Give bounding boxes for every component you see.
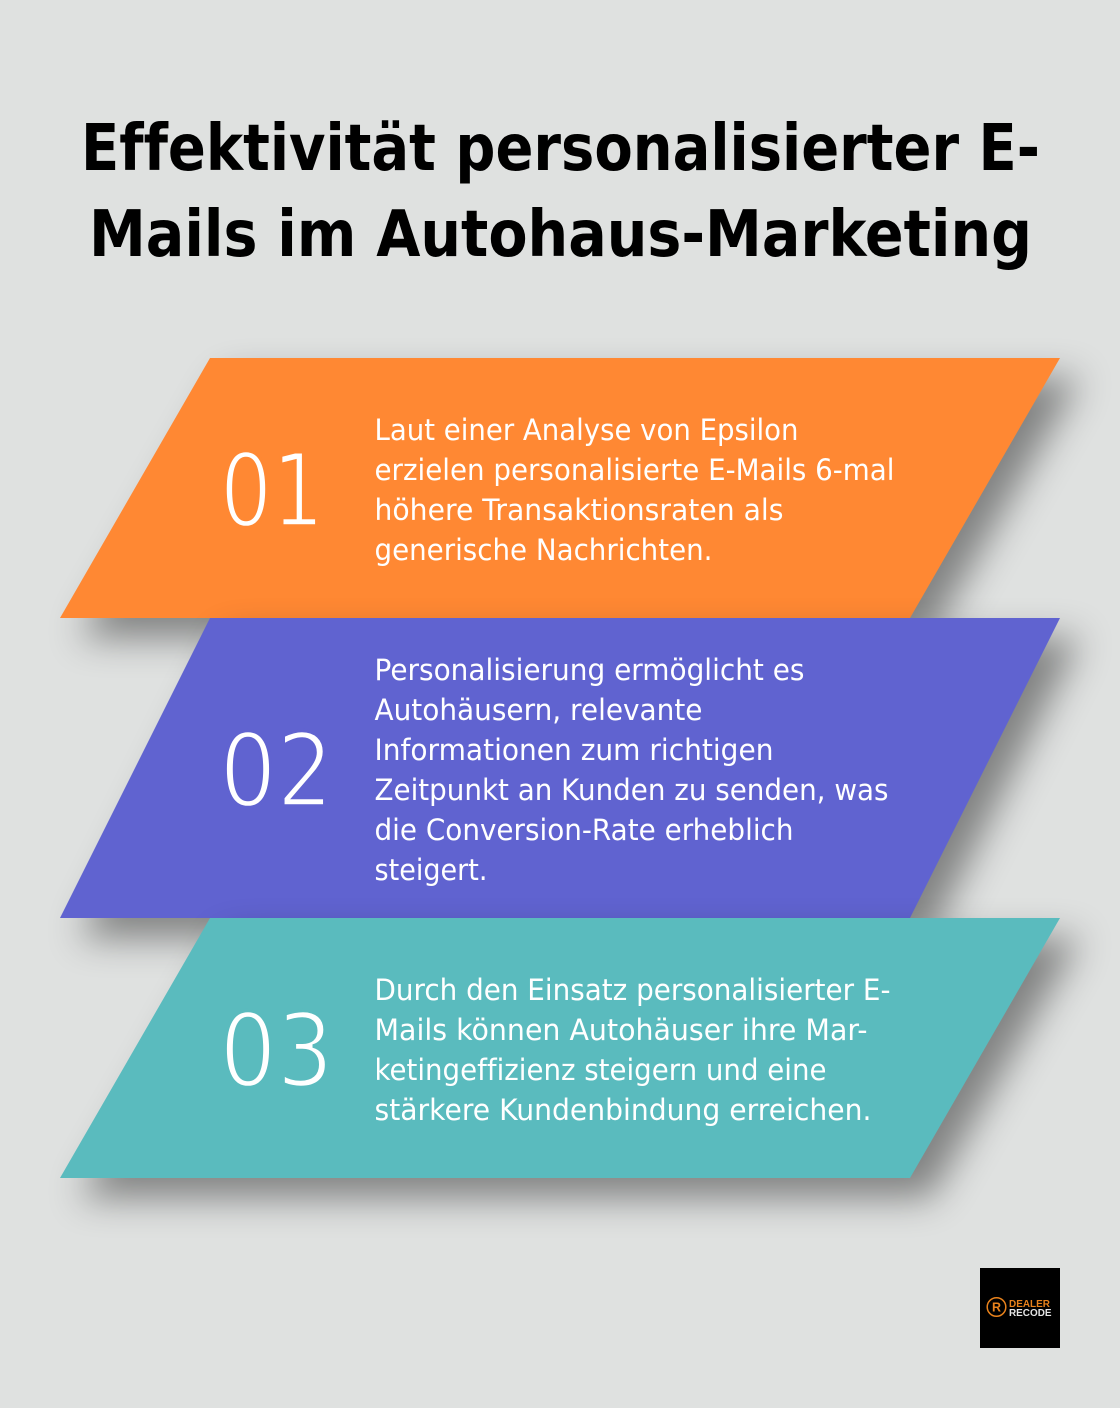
panel 03 background [60,918,1060,1178]
title [81,112,1040,272]
panel 03 text: ketingeffizienz steigern und eine [374,1053,826,1087]
panel 02: indigo parallelogram [60,618,1060,918]
panel 03 text: stärkere Kundenbindung erreichen. [374,1093,872,1127]
panel 03 text: Mails können Autohäuser ihre Mar- [374,1013,868,1047]
panel 02 text: Informationen zum richtigen [374,733,774,767]
panel 02 text: die Conversion-Rate erheblich [374,813,794,847]
panel 03 text: Durch den Einsatz personalisierter E- [374,973,890,1007]
logo: Dealer Recode: DEALER [1009,1298,1050,1310]
panel 02 text: Personalisierung ermöglicht es [374,653,804,687]
number 03: 03 [220,992,334,1111]
title: Mails im Autohaus-Marketing [89,198,1032,272]
panel 03 text [374,973,890,1127]
logo: Dealer Recode: R [992,1300,1001,1314]
panel 01 text: höhere Transaktionsraten als [374,493,784,527]
panel 01 text: generische Nachrichten. [374,533,712,567]
panel 02 text: steigert. [374,853,488,887]
panel 01 background [60,358,1060,618]
logo: Dealer Recode: RECODE [1009,1307,1052,1319]
panel 03: teal parallelogram [60,918,1060,1178]
panel 01 text [374,413,894,567]
panel 02 text: Zeitpunkt an Kunden zu senden, was [374,773,888,807]
panel 02 background [60,618,1060,918]
number 02: 02 [220,712,334,831]
number 01: 01 [220,432,324,551]
logo: Dealer Recode [980,1268,1060,1348]
panel 01 text: Laut einer Analyse von Epsilon [374,413,798,447]
panel 01: orange parallelogram [60,358,1060,618]
panel 01 text: erzielen personalisierte E-Mails 6-mal [374,453,894,487]
panel 02 text [374,653,888,887]
panel 02 text: Autohäusern, relevante [374,693,702,727]
